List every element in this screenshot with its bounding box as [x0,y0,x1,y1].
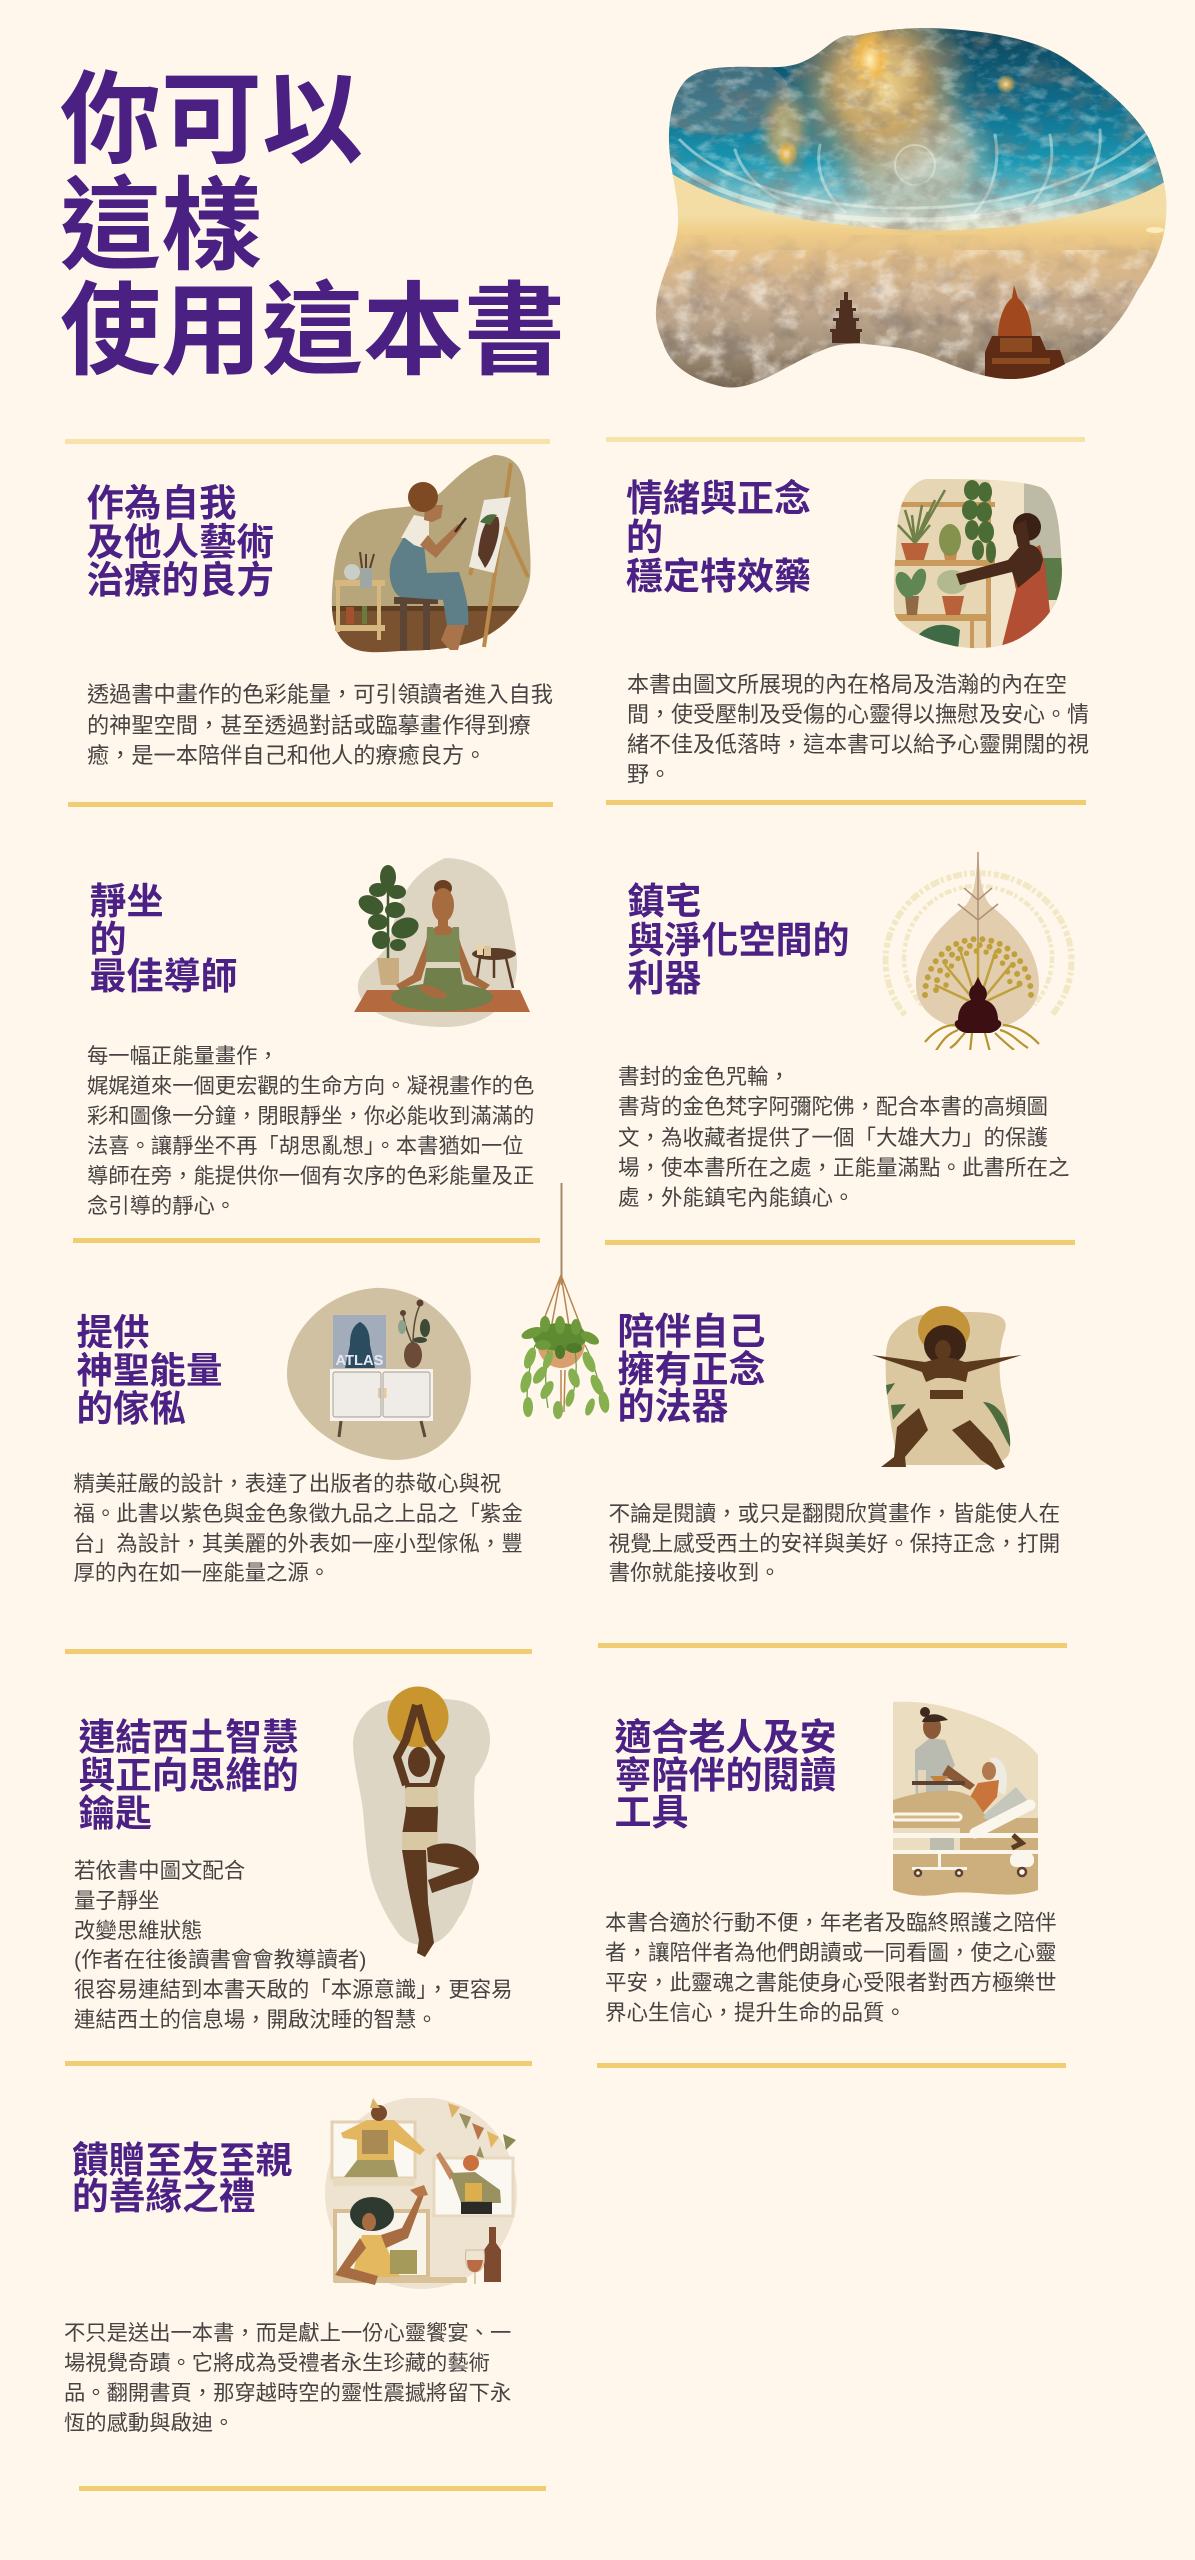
book [333,1315,386,1369]
figure [872,1325,1022,1470]
hero image: cosmic sky over temples in a blob [656,28,1166,388]
body text: 本書合適於行動不便，年老者及臨終照護之陪伴 [605,1911,1057,1935]
heading [614,1717,836,1833]
stool [394,597,438,650]
body text: 視覺上感受西土的安祥與美好。保持正念，打開 [609,1532,1060,1556]
vase with flowers [398,1300,430,1368]
large temple [985,285,1065,379]
heading: 饋贈至友至親 [72,2140,292,2181]
body text: 台」為設計，其美麗的外表如一座小型傢俬，豐 [74,1532,523,1556]
body text: 恆的感動與啟迪。 [64,2411,234,2435]
body text: (作者在往後讀書會會教導讀者) [74,1948,366,1972]
body text: 場視覺奇蹟。它將成為受禮者永生珍藏的藝術 [64,2351,490,2375]
person with gift, top left [341,2098,425,2177]
body text [609,1502,1060,1585]
leaves [886,1383,1010,1447]
body text: 娓娓道來一個更宏觀的生命方向。凝視畫作的色 [87,1074,534,1098]
icon: woman meditating on rug [354,858,530,1027]
panel: hospice companion [605,1702,1057,2025]
woman [956,513,1050,650]
icon: video-call friends exchanging gifts [325,2098,517,2289]
heading: 與淨化空間的 [628,920,850,960]
heading: 利器 [628,958,702,999]
patient [970,1758,1007,1815]
pillow [981,1787,1027,1822]
body text: 書背的金色梵字阿彌陀佛，配合本書的高頻圖 [618,1095,1048,1119]
heading [86,482,274,601]
body text: 福。此書以紫色與金色象徵九品之上品之「紫金 [74,1502,523,1526]
body text [87,682,553,768]
heading [78,1717,299,1834]
body text: 場，使本書所在之處，正能量滿點。此書所在之 [618,1156,1070,1180]
body text [74,1472,523,1585]
body text: 本書由圖文所展現的內在格局及浩瀚的內在空 [627,672,1067,697]
cabinet [330,1369,433,1437]
heading: 適合老人及安 [614,1717,836,1758]
heading [628,881,850,999]
body text: 若依書中圖文配合 [74,1859,245,1883]
body text: 透過書中畫作的色彩能量，可引領讀者進入自我 [87,682,553,707]
wine bottle and glass [465,2227,501,2284]
meditating figure [391,880,493,1011]
icon: woman watering plants [894,479,1062,648]
body text [627,672,1089,787]
body text: 連結西土的信息場，開啟沈睡的智慧。 [74,2008,438,2032]
easel and canvas [469,463,528,647]
heading: 的善緣之禮 [72,2176,255,2217]
panel: key to wisdom [74,1686,513,2032]
body text: 野。 [627,762,671,787]
panel: companion of mindfulness [609,1306,1060,1585]
heading: 及他人藝術 [86,520,274,562]
title: 這樣 [60,170,262,282]
heading: 的傢俬 [76,1388,186,1429]
body text [74,1859,513,2032]
body text: 每一幅正能量畫作， [87,1044,279,1068]
body text: 導師在旁，能提供你一個有次序的色彩能量及正 [87,1164,534,1188]
panel: protecting the home [618,851,1074,1210]
body text: 平安，此靈魂之書能使身心受限者對西方極樂世 [605,1971,1057,1995]
body text: 者，讓陪伴者為他們朗讀或一同看圖，使之心靈 [605,1941,1057,1965]
body text: 緒不佳及低落時，這本書可以給予心靈開闊的視 [627,732,1089,757]
heading: 最佳導師 [90,956,238,997]
body text: 處，外能鎮宅內能鎮心。 [618,1186,855,1210]
body text: 量子靜坐 [74,1889,160,1913]
heading: 情緒與正念 [626,478,811,519]
heading [626,478,811,597]
title: 使用這本書 [60,276,565,388]
heading: 鑰匙 [78,1793,152,1834]
panel: art therapy [86,455,553,768]
body text: 厚的內在如一座能量之源。 [74,1561,330,1585]
table with candles [472,942,516,988]
body text: 間，使受壓制及受傷的心靈得以撫慰及安心。情 [627,702,1089,727]
body text: 的神聖空間，甚至透過對話或臨摹畫作得到療 [87,713,531,738]
heading: 的法器 [618,1386,728,1427]
person with gift, right [436,2146,501,2214]
small temple [830,292,862,343]
bunting [448,2103,516,2150]
panel: sacred furniture [74,1288,523,1585]
heading: 擁有正念 [618,1348,766,1390]
body text: 彩和圖像一分鐘，閉眼靜坐，你必能收到滿滿的 [87,1104,534,1128]
heading: 連結西土智慧 [78,1717,299,1758]
icon: nurse with patient in bed [893,1702,1038,1896]
icon: cabinet with book and vase [287,1288,471,1460]
heading: 提供 [76,1312,150,1353]
body text [605,1911,1057,2025]
body text: 不論是閱讀，或只是翻閱欣賞畫作，皆能使人在 [609,1502,1060,1526]
body text: 不只是送出一本書，而是獻上一份心靈饗宴、一 [64,2321,511,2345]
body text: 癒，是一本陪伴自己和他人的療癒良方。 [87,743,486,768]
Buddha silhouette [955,977,1001,1033]
body text: 界心生信心，提升生命的品質。 [605,2001,906,2025]
icon: bodhi leaf with meditating Buddha [882,851,1074,1050]
icon: woman in tree pose with golden disc [353,1686,490,1957]
panel: meditation teacher [87,858,534,1218]
heading: 的 [626,517,663,558]
heading: 與正向思維的 [78,1755,299,1796]
heading [618,1311,766,1427]
heading: 作為自我 [86,482,236,524]
icon: hanging plant [520,1183,610,1419]
title [60,65,565,388]
heading [72,2140,292,2217]
heading: 陪伴自己 [618,1311,766,1352]
book: ATLAS [336,1352,384,1369]
heading: 的 [90,918,126,960]
body text: 念引導的靜心。 [87,1194,236,1218]
heading: 靜坐 [90,881,164,922]
icon: woman in warrior pose [872,1306,1022,1470]
body text [64,2321,511,2435]
body text: 精美莊嚴的設計，表達了出版者的恭敬心與祝 [74,1472,501,1496]
heading [90,881,238,997]
heading: 工具 [614,1792,688,1833]
heading: 穩定特效藥 [626,556,811,597]
heading [76,1312,222,1429]
panel: gift for friends and family [64,2098,517,2435]
body text: 書封的金色咒輪， [618,1065,790,1089]
title: 你可以 [60,65,363,177]
heading: 神聖能量 [76,1350,222,1391]
heading: 鎮宅 [628,881,702,922]
body text: 品。翻開書頁，那穿越時空的靈性震撼將留下永 [64,2381,511,2405]
heading: 治療的良方 [86,559,274,601]
body text: 法喜。讓靜坐不再「胡思亂想」。本書猶如一位 [87,1134,524,1158]
icon: artist painting at easel [332,455,531,652]
nurse [915,1707,975,1800]
body text: 文，為收藏者提供了一個「大雄大力」的保護 [618,1126,1048,1150]
body text [618,1065,1070,1210]
body text: 很容易連結到本書天啟的「本源意識」，更容易 [74,1978,513,2002]
bed [890,1805,1038,1876]
heading: 寧陪伴的閱讀 [614,1754,836,1796]
panel: emotional stability [626,478,1089,787]
potted plant [355,865,422,985]
overalls figure [390,482,468,650]
body text: 書你就能接收到。 [609,1561,781,1585]
body text: 改變思維狀態 [74,1919,202,1943]
body text [87,1044,534,1218]
person with gift, bottom [335,2185,428,2285]
